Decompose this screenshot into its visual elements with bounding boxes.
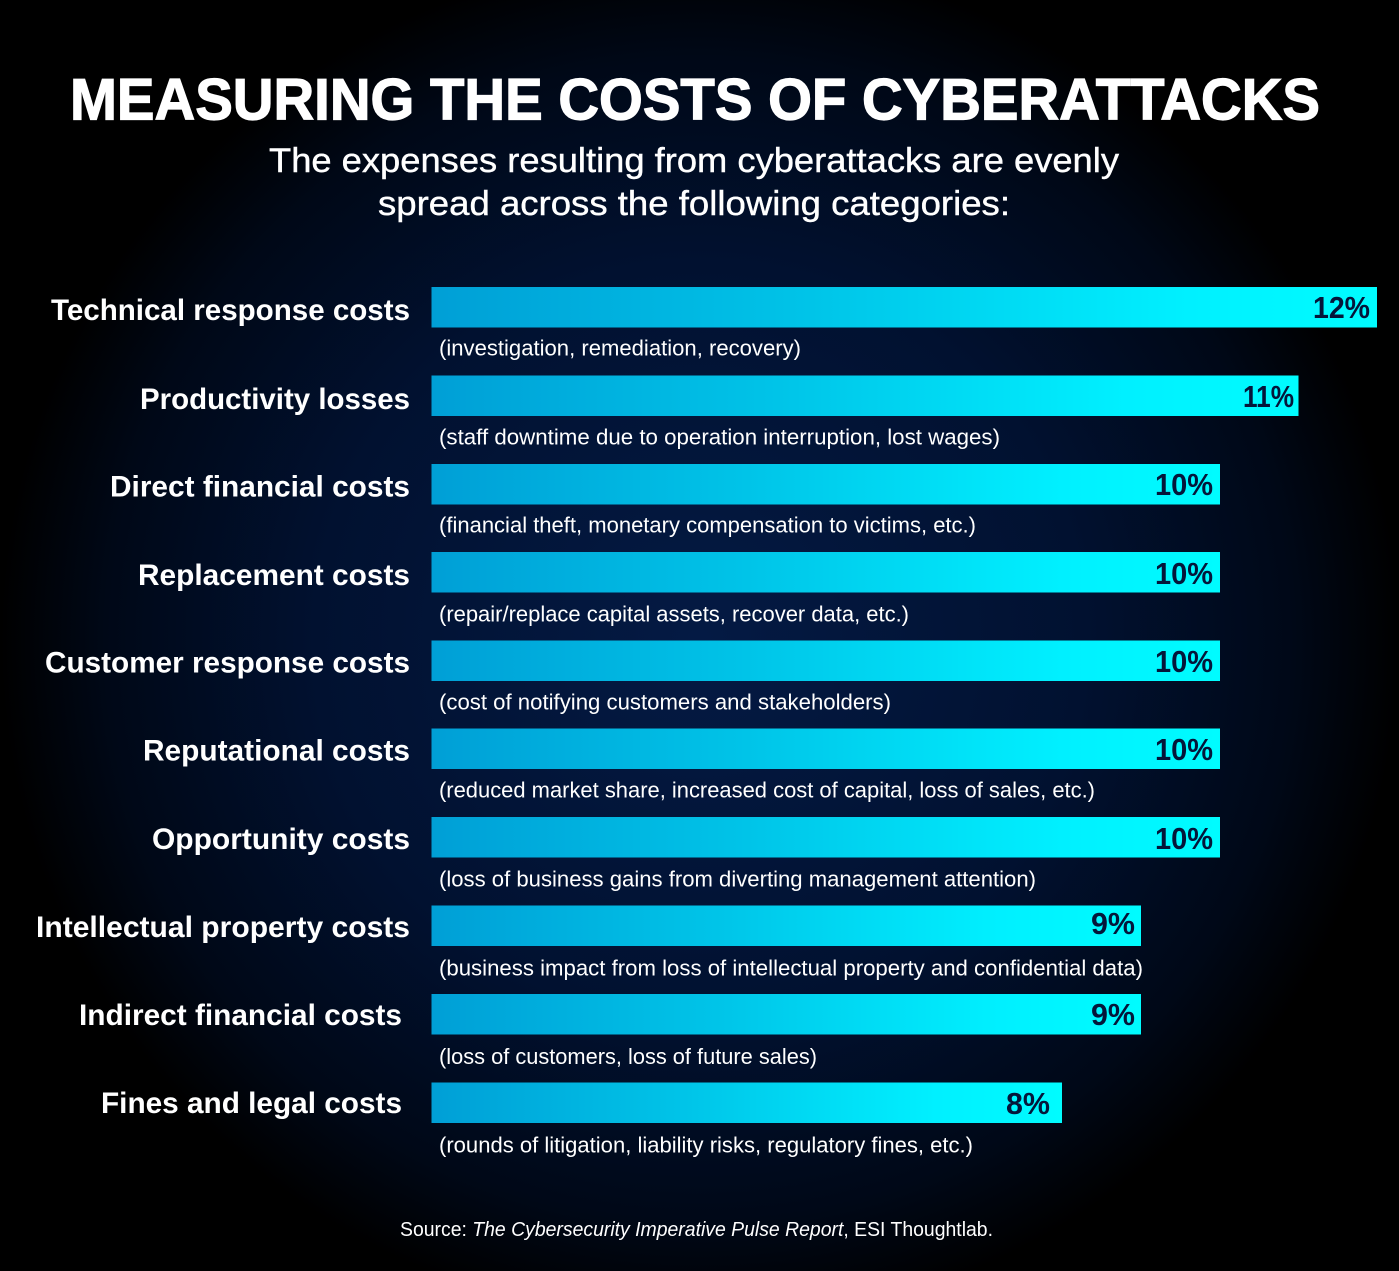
bar chart (36, 287, 1377, 1158)
row: Customer response costs (45, 640, 1220, 714)
row: Indirect financial costs (79, 994, 1141, 1069)
row: Direct financial costs: 10% (1155, 467, 1213, 502)
row: Fines and legal costs: 8% (1006, 1086, 1050, 1121)
row: Indirect financial costs: 9% (1091, 997, 1135, 1032)
row: Intellectual property costs: 9% (1091, 906, 1135, 941)
row: Replacement costs: 10% (1155, 556, 1213, 591)
row: Replacement costs (138, 552, 1220, 626)
subtitle: spread across the following categories: (378, 185, 1010, 223)
source note: Source: The Cybersecurity Imperative Pulse Report, ESI Thoughtlab. (400, 1219, 993, 1241)
row: Productivity losses: 11% (1243, 379, 1294, 414)
subtitle: The expenses resulting from cyberattacks are evenly (269, 142, 1119, 180)
row: Fines and legal costs: Fines and legal costs (101, 1087, 402, 1120)
row: Intellectual property costs (36, 906, 1143, 980)
row: Productivity losses: Productivity losses (140, 383, 410, 416)
row: Opportunity costs: (loss of business gains from diverting management attention) (439, 866, 1036, 892)
row: Reputational costs: 10% (1155, 732, 1213, 767)
row: Technical response costs: Technical response costs (51, 294, 410, 327)
row: Productivity losses: (staff downtime due to operation interruption, lost wages) (439, 424, 1000, 450)
row: Technical response costs: 12% (1313, 290, 1370, 325)
row: Opportunity costs: Opportunity costs (152, 823, 410, 856)
row: Reputational costs: (reduced market share, increased cost of capital, loss of sales, etc.) (439, 778, 1095, 802)
row: Customer response costs: 10% (1155, 644, 1213, 679)
row: Reputational costs (143, 728, 1220, 802)
row: Intellectual property costs: Intellectual property costs (36, 911, 410, 944)
row: Productivity losses (140, 376, 1298, 450)
row: Customer response costs: (cost of notifying customers and stakeholders) (439, 690, 891, 714)
row: Direct financial costs (110, 464, 1220, 538)
row: Direct financial costs: Direct financial costs (110, 470, 410, 504)
row: Technical response costs (51, 287, 1377, 360)
row: Replacement costs: (repair/replace capital assets, recover data, etc.) (439, 602, 909, 626)
row: Opportunity costs (152, 817, 1220, 892)
row: Indirect financial costs: Indirect financial costs (79, 999, 402, 1032)
row: Reputational costs: Reputational costs (143, 734, 410, 768)
row: Opportunity costs: 10% (1155, 821, 1213, 856)
row: Intellectual property costs: (business impact from loss of intellectual property and confidential data) (439, 956, 1143, 980)
subtitle (269, 142, 1119, 223)
row: Technical response costs: (investigation, remediation, recovery) (439, 336, 801, 360)
row: Fines and legal costs: (rounds of litigation, liability risks, regulatory fines, etc.) (439, 1132, 973, 1158)
row: Indirect financial costs: (loss of customers, loss of future sales) (439, 1044, 817, 1069)
row: Direct financial costs: (financial theft, monetary compensation to victims, etc.) (439, 512, 976, 538)
row: Customer response costs: Customer response costs (45, 646, 410, 680)
title: MEASURING THE COSTS OF CYBERATTACKS (70, 68, 1320, 132)
row: Fines and legal costs (101, 1082, 1062, 1158)
row: Replacement costs: Replacement costs (138, 559, 410, 592)
